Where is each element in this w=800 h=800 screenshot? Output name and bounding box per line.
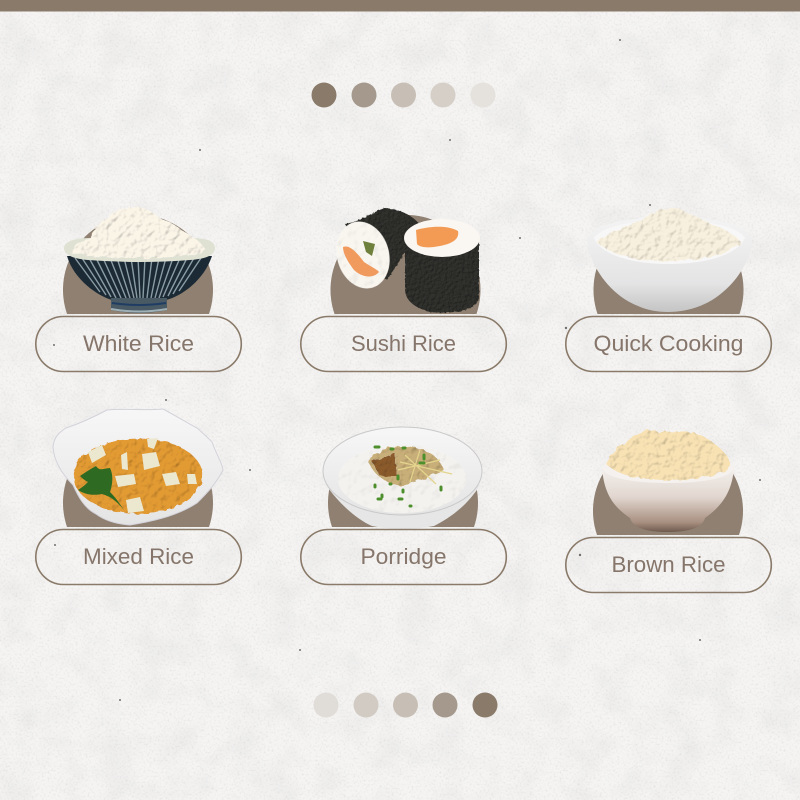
card: white rice <box>36 207 241 372</box>
label pill: mixed rice <box>36 530 241 584</box>
backdrop circle: brown rice <box>593 436 743 535</box>
icon: brown rice bowl <box>602 430 734 532</box>
card: porridge <box>301 427 506 584</box>
backdrop circle: white rice <box>63 215 213 314</box>
icon: white rice bowl <box>64 207 215 313</box>
icon: porridge bowl <box>323 427 482 529</box>
card: mixed rice <box>36 409 241 584</box>
card: sushi rice <box>301 208 506 372</box>
icon: sushi rolls <box>329 208 480 313</box>
label text: Quick Cooking: Quick Cooking <box>594 331 744 356</box>
icon: mixed rice plate <box>53 409 223 525</box>
label text: Sushi Rice: Sushi Rice <box>351 331 456 356</box>
backdrop circle: quick cooking <box>594 215 744 314</box>
backdrop circle: mixed rice <box>63 428 213 527</box>
label pill: quick cooking <box>566 316 771 372</box>
label pill: porridge <box>301 530 506 584</box>
label text: Brown Rice: Brown Rice <box>612 552 726 577</box>
card: quick cooking <box>566 208 771 372</box>
label text: White Rice: White Rice <box>83 331 194 356</box>
icon: quick cooking rice bowl <box>587 208 752 312</box>
label pill: brown rice <box>566 538 771 592</box>
label pill: sushi rice <box>301 316 506 372</box>
label text: Porridge: Porridge <box>360 544 446 569</box>
backdrop circle: porridge <box>328 428 478 527</box>
paper specks <box>53 39 761 701</box>
label pill: white rice <box>36 316 241 372</box>
top bar <box>0 0 800 12</box>
top pagination dots <box>312 82 496 108</box>
bottom pagination dots <box>314 692 498 718</box>
label text: Mixed Rice: Mixed Rice <box>83 544 194 569</box>
card: brown rice <box>566 430 771 592</box>
backdrop circle: sushi rice <box>330 215 481 314</box>
